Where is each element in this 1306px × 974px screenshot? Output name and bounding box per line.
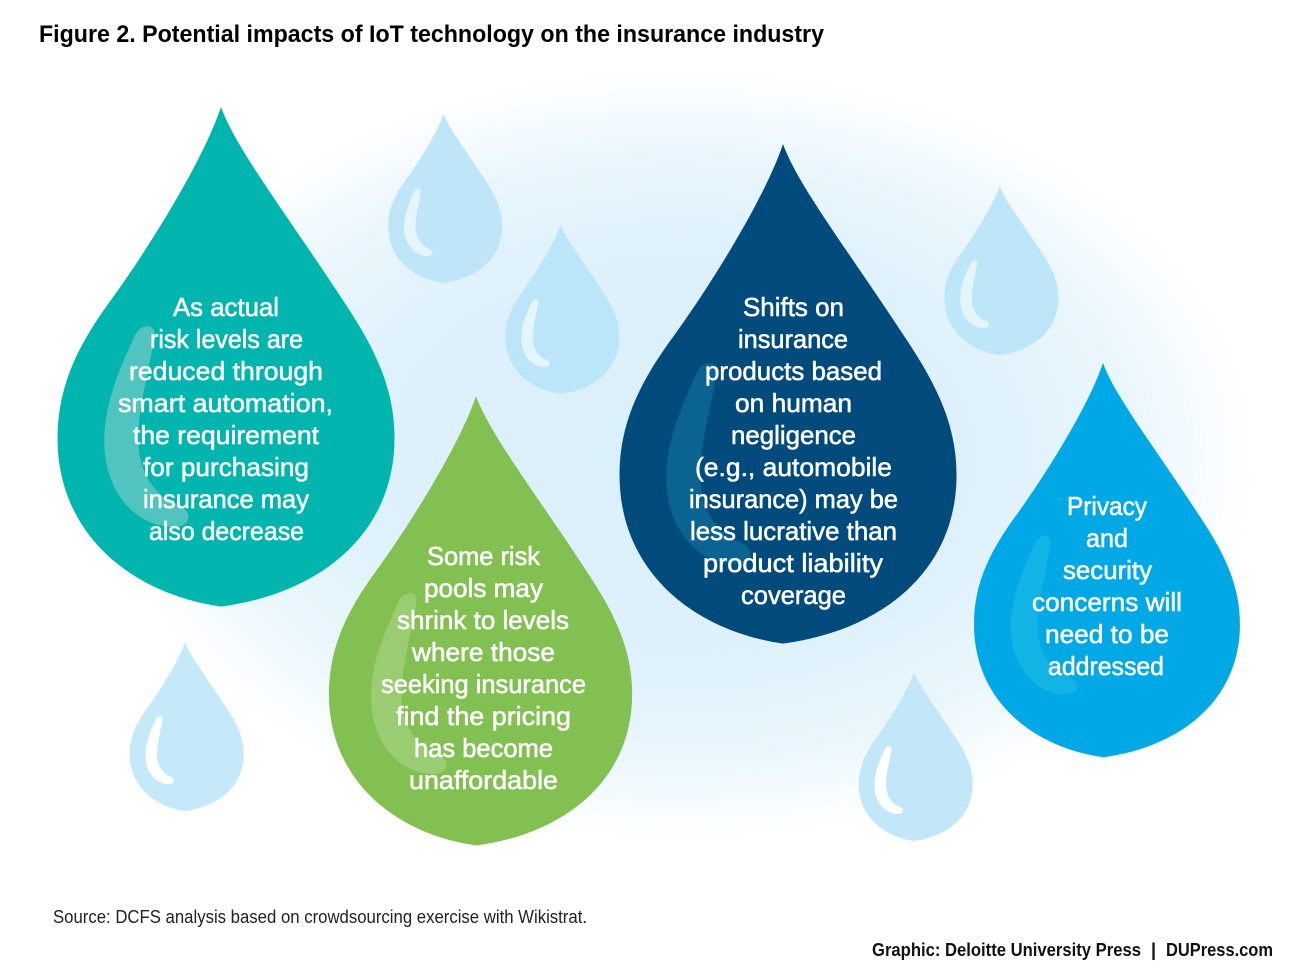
text: insurance products: coverage [741,580,846,610]
text: privacy and security: concerns will [1032,587,1182,617]
text: risk pools: where those [411,637,555,667]
drop: privacy and security [974,363,1240,757]
small drop: upper middle [505,225,619,394]
text: automation risk: the requirement [133,420,320,450]
text: automation risk: risk levels are [150,324,303,354]
small drop: lower right [859,672,973,841]
text: risk pools: has become [414,733,553,763]
drop: risk pools [329,396,632,846]
text: privacy and security: security [1063,555,1152,585]
credit line: Graphic: Deloitte University Press [872,940,1141,960]
small drop: top left [388,114,502,283]
highlight: insurance products [666,363,750,564]
text: risk pools: shrink to levels [397,605,569,635]
drop: automation risk [58,107,395,607]
credit line: | [1151,940,1156,960]
text: automation risk: reduced through [129,356,323,386]
title: Figure 2. Potential impacts of IoT technology on the insurance industry [39,21,825,48]
text: privacy and security: need to be [1045,619,1169,649]
text: risk pools [381,541,586,795]
text: automation risk [118,292,333,546]
text: insurance products: less lucrative than [690,516,897,546]
text: insurance products: (e.g., automobile [695,452,892,482]
highlight: risk pools [371,593,447,774]
text: insurance products [689,292,898,610]
drop: insurance products [620,144,957,644]
text: risk pools: find the pricing [396,701,571,731]
small drop: upper right [944,186,1058,355]
text: automation risk: insurance may [143,484,309,514]
text: risk pools: unaffordable [409,765,558,795]
text: automation risk: also decrease [149,516,304,546]
text: automation risk: smart automation, [118,388,333,418]
text: risk pools: seeking insurance [381,669,586,699]
background glow [105,70,1255,840]
text: risk pools: pools may [424,573,543,603]
text: insurance products: insurance) may be [689,484,898,514]
text: automation risk: As actual [173,292,279,322]
text: insurance products: product liability [703,548,883,578]
text: privacy and security: Privacy [1067,491,1147,521]
credit line: DUPress.com [1166,940,1273,960]
highlight: automation risk [104,326,188,527]
small drop: lower left [130,642,244,811]
text: privacy and security: and [1086,523,1128,553]
text: insurance products: insurance [738,324,848,354]
text: insurance products: on human [735,388,852,418]
text: privacy and security [1032,491,1182,681]
source note: Source: DCFS analysis based on crowdsourcing exercise with Wikistrat. [53,907,587,927]
text: privacy and security: addressed [1048,651,1164,681]
text: insurance products: Shifts on [743,292,844,322]
text: insurance products: products based [705,356,882,386]
text: insurance products: negligence [731,420,856,450]
highlight: privacy and security [1011,536,1077,694]
text: risk pools: Some risk [427,541,541,571]
text: automation risk: for purchasing [143,452,309,482]
